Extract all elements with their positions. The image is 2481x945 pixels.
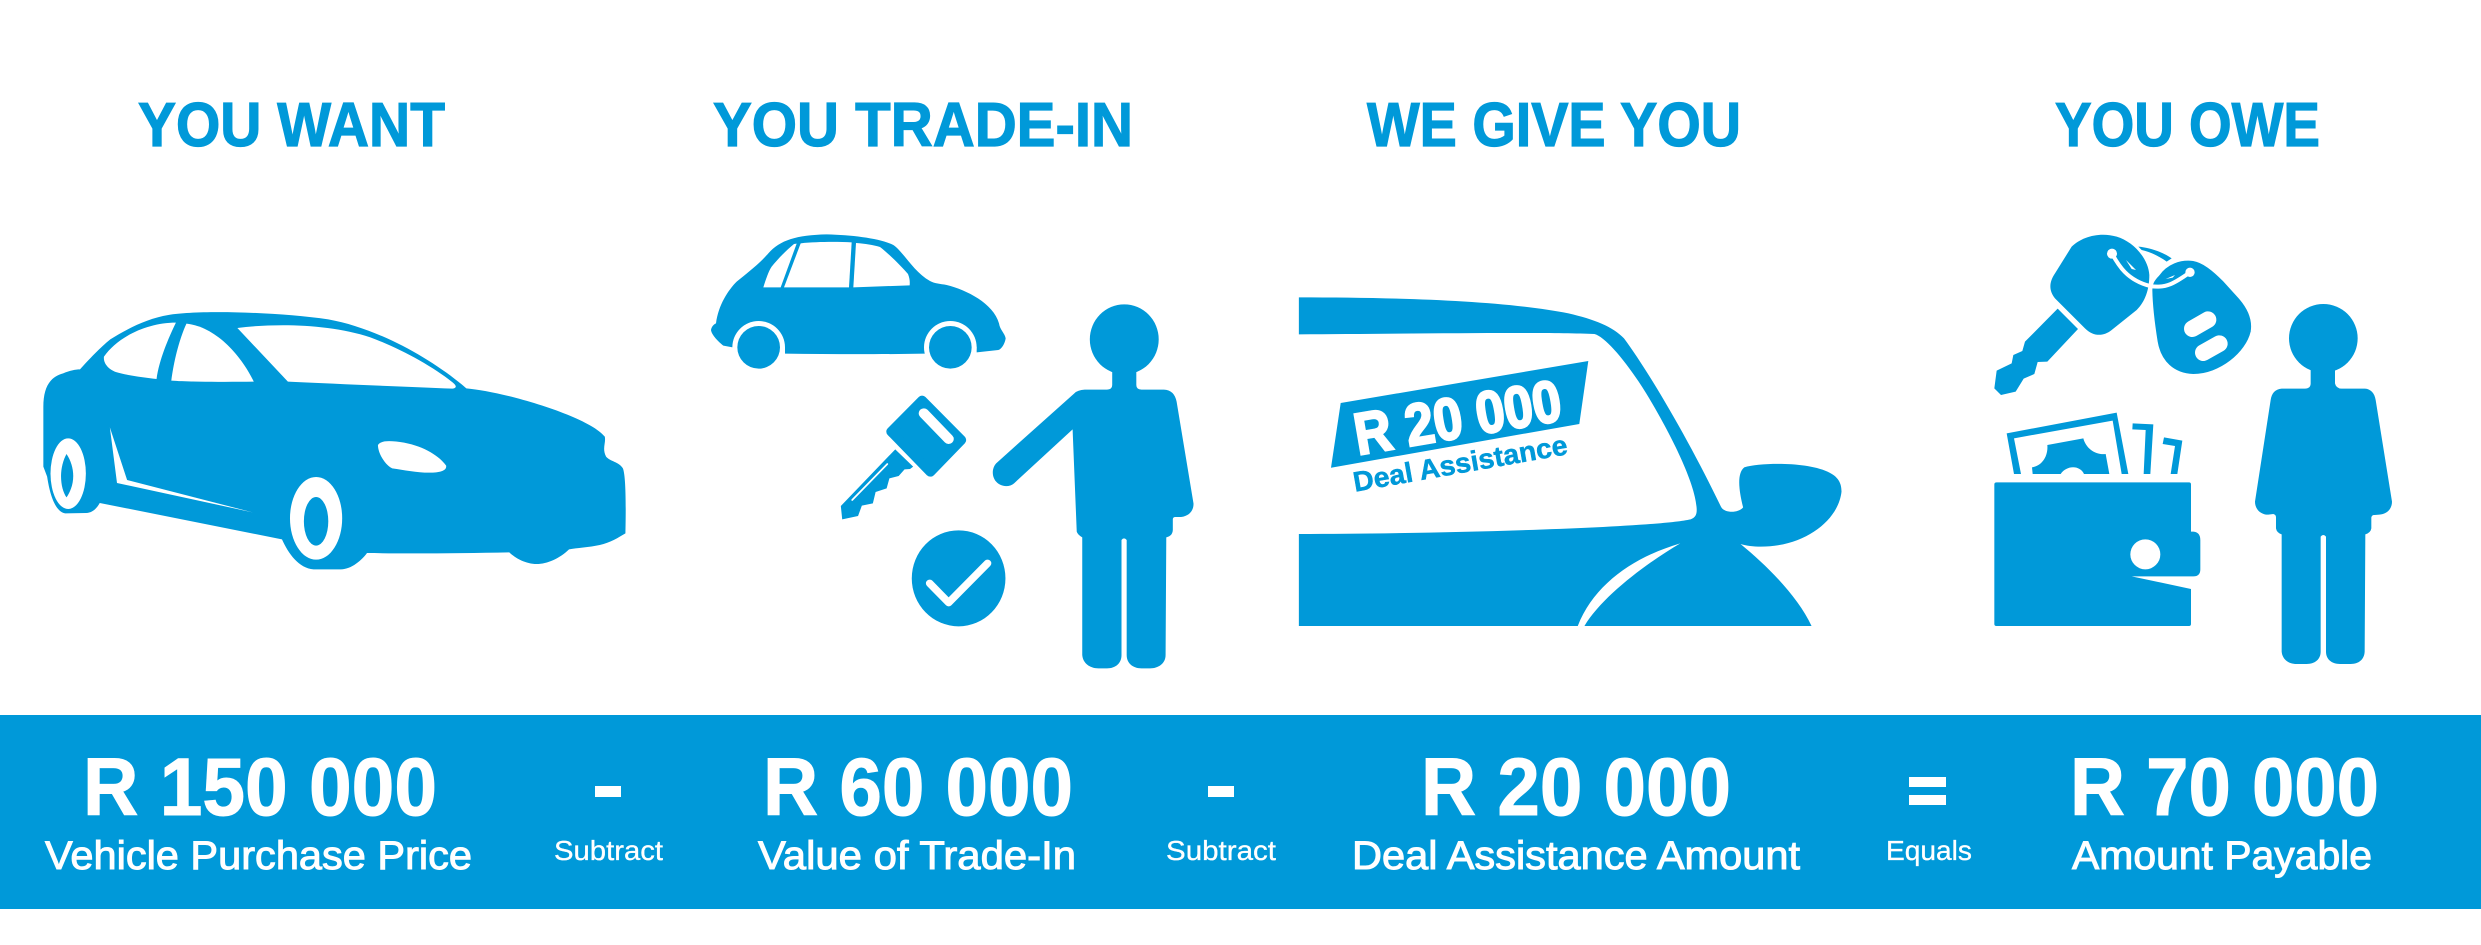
label: trade-in value: Value of Trade-In (758, 834, 1076, 878)
sticker label: Deal Assistance (1351, 429, 1570, 498)
figure: amount payable: R 70 000 (2070, 742, 2379, 833)
icon: large sedan car (43, 312, 626, 569)
panel: calculation bar (0, 715, 2481, 909)
icon: standing person (2255, 304, 2392, 664)
icon: car windscreen and mirror (1299, 297, 1842, 626)
heading: you trade-in: YOU TRADE-IN (713, 91, 1133, 160)
sticker band (1331, 361, 1588, 468)
figure: deal assistance: R 20 000 (1421, 742, 1731, 833)
panel: deal assistance windscreen illustration (1299, 297, 1842, 626)
icon: wallet with banknotes (1994, 413, 2200, 626)
icon: check mark badge (912, 530, 1005, 626)
heading: we give you: WE GIVE YOU (1367, 91, 1741, 160)
panel: you owe illustration (1994, 235, 2392, 664)
icon: car key (841, 400, 961, 519)
sticker amount: R 20 000 (1349, 368, 1566, 468)
label: deal assistance: Deal Assistance Amount (1352, 834, 1800, 878)
operator: minus (1208, 786, 1234, 797)
label: vehicle price: Vehicle Purchase Price (45, 834, 472, 878)
operator label: subtract: Subtract (554, 835, 663, 866)
label: amount payable: Amount Payable (2072, 834, 2372, 878)
operator label: equals: Equals (1886, 835, 1972, 866)
icon: person handing over key (993, 304, 1194, 668)
operator: minus (595, 786, 621, 797)
icon: keys and remote fob (1994, 235, 2252, 395)
icon: small hatchback car (711, 234, 1006, 374)
heading: you want: YOU WANT (138, 91, 445, 160)
figure: trade-in value: R 60 000 (763, 742, 1073, 833)
operator label: subtract: Subtract (1166, 835, 1276, 866)
figure: vehicle price: R 150 000 (83, 742, 437, 833)
heading: you owe: YOU OWE (2055, 91, 2320, 160)
operator: equals (1909, 777, 1946, 805)
panel: trade-in illustration (711, 234, 1194, 668)
